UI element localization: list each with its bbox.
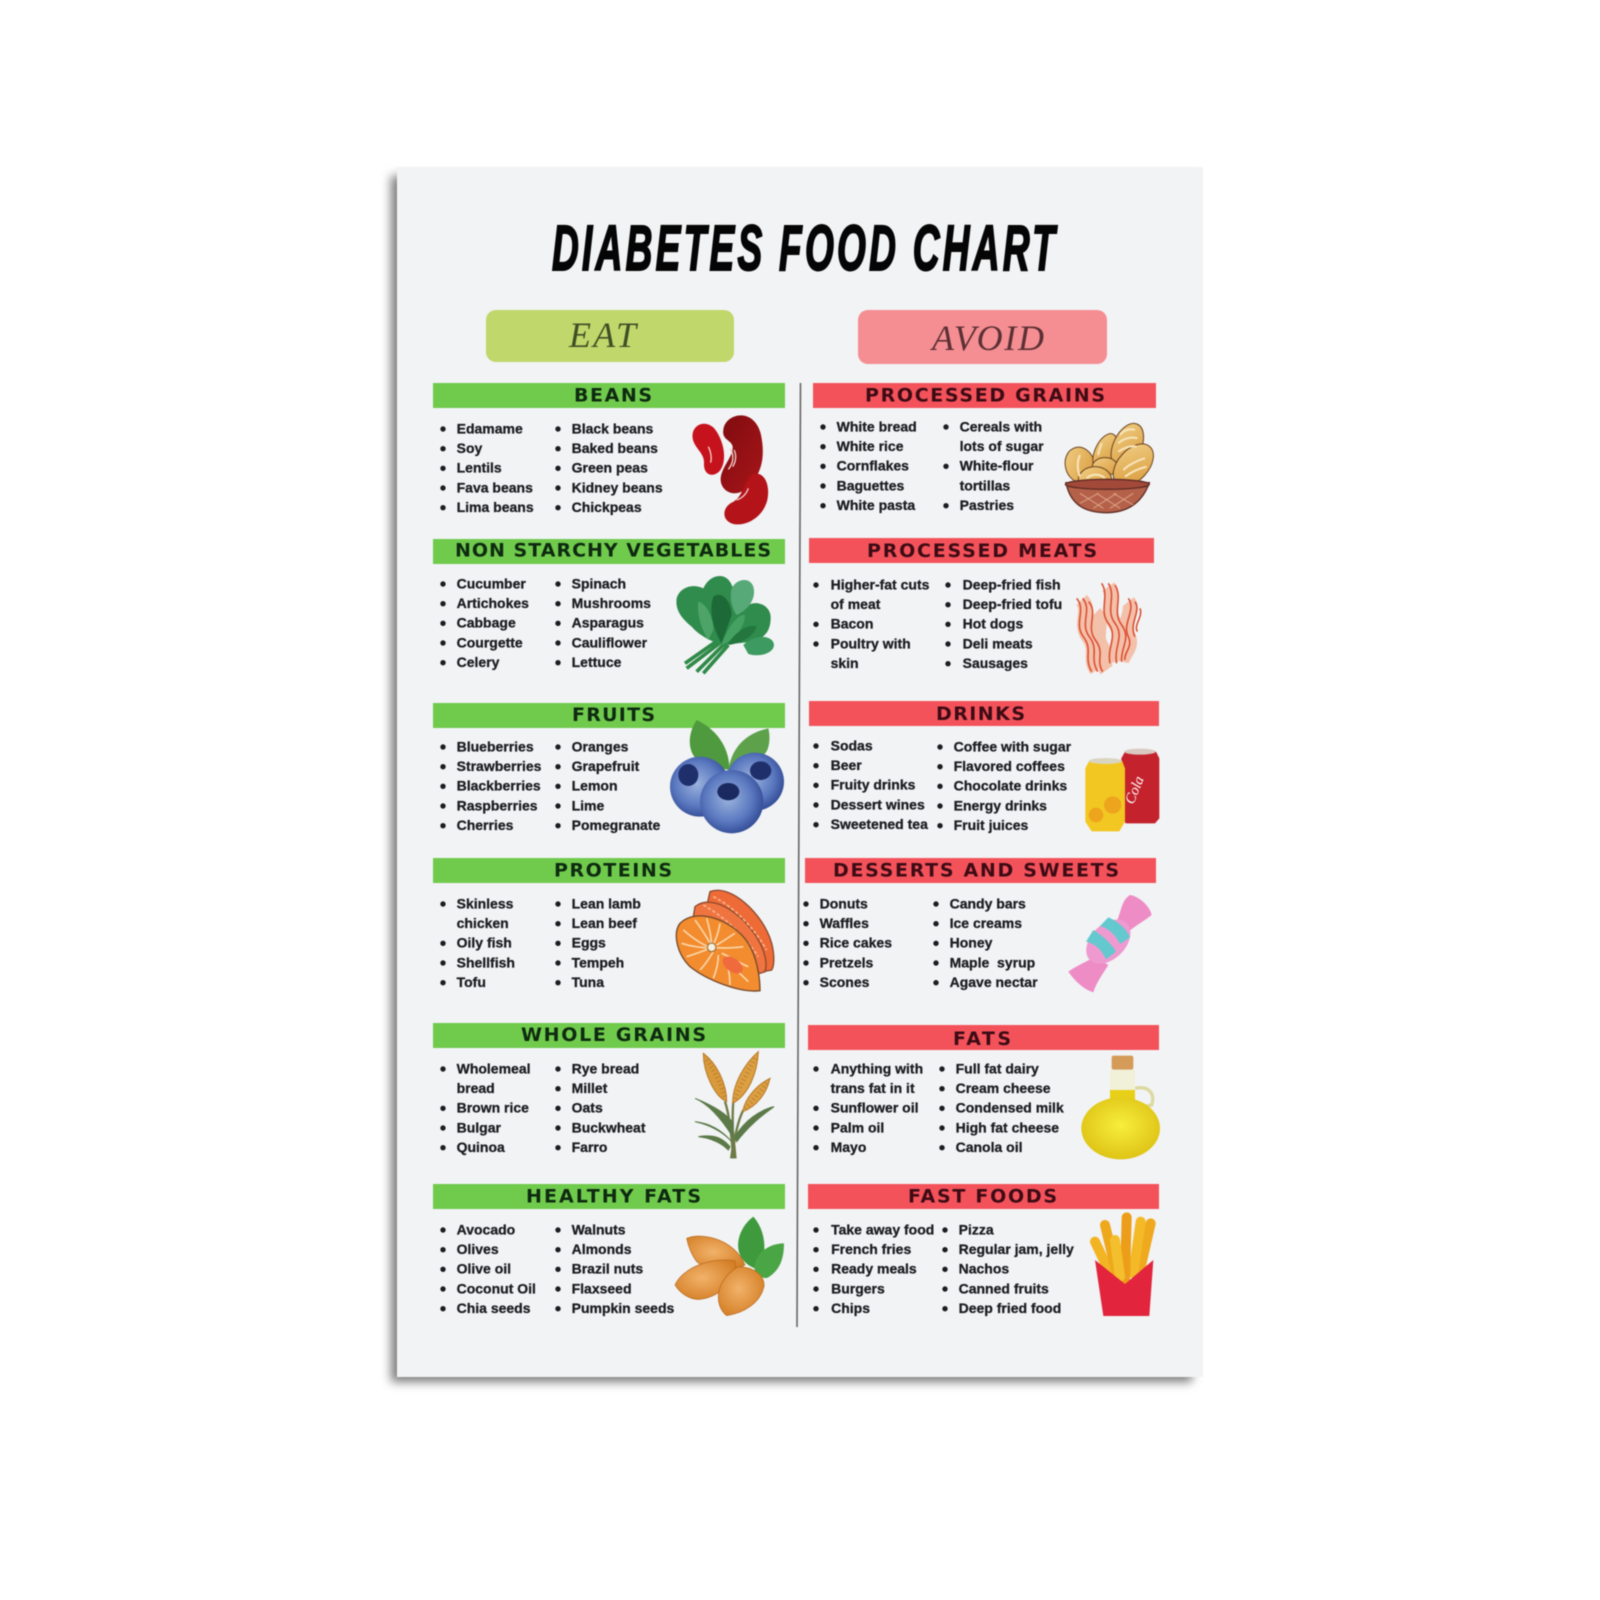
- list: desserts column 1: [806, 895, 892, 990]
- icon: drink cans: [1085, 749, 1159, 831]
- list: drinks column 1: Sodas: [831, 737, 873, 753]
- panel: processed meats: PROCESSED MEATS: [867, 540, 1097, 562]
- list: healthy fats column 1: Olives: [457, 1241, 499, 1257]
- panel: fats: [808, 1025, 1160, 1159]
- list: processed meats column 1: Poultry with: [831, 635, 911, 651]
- panel: fruits: [433, 703, 785, 833]
- list: whole grains column 1: Wholemeal: [457, 1060, 531, 1076]
- list: fruits column 1: [443, 738, 542, 833]
- list: proteins column 1: Oily fish: [457, 935, 512, 951]
- list: whole grains column 1: Brown rice: [457, 1100, 529, 1116]
- panel: healthy fats: HEALTHY FATS: [526, 1185, 701, 1207]
- list: fats column 2: Condensed milk: [956, 1100, 1064, 1116]
- list: drinks column 2: [940, 738, 1072, 833]
- list: proteins column 2: Tuna: [572, 974, 604, 990]
- list: healthy fats column 2: Walnuts: [572, 1221, 626, 1237]
- list: desserts column 1: Pretzels: [820, 954, 874, 970]
- list: desserts column 2: Candy bars: [950, 895, 1026, 911]
- list: drinks column 1: Sweetened tea: [831, 816, 928, 832]
- list: drinks column 2: Coffee with sugar: [954, 738, 1072, 754]
- list: fruits column 2: Oranges: [572, 738, 629, 754]
- list: fats column 1: [816, 1060, 923, 1155]
- list: vegetables column 2: Lettuce: [572, 654, 622, 670]
- list: beans column 1: [443, 420, 534, 515]
- column divider: [797, 383, 800, 1327]
- icon: almonds: [675, 1217, 784, 1316]
- panel: proteins: [433, 858, 785, 991]
- list: healthy fats column 1: Olive oil: [457, 1261, 511, 1277]
- list: fats column 1: Anything with: [831, 1060, 923, 1076]
- list: beans column 2: [558, 420, 663, 515]
- list: fast foods column 1: French fries: [831, 1241, 911, 1257]
- list: desserts column 1: Waffles: [820, 915, 869, 931]
- list: processed meats column 1: [816, 576, 930, 671]
- list: desserts column 2: Honey: [950, 935, 993, 951]
- list: fats column 2: [942, 1060, 1064, 1155]
- icon: kidney beans: [692, 415, 768, 524]
- list: fruits column 2: Lemon: [572, 778, 617, 794]
- panel: fast foods: [808, 1184, 1159, 1316]
- list: fats column 2: Cream cheese: [956, 1080, 1051, 1096]
- list: whole grains column 2: Rye bread: [572, 1060, 639, 1076]
- list: processed meats column 2: Sausages: [963, 655, 1028, 671]
- list: processed meats column 2: Deli meats: [963, 635, 1033, 651]
- list: processed meats column 2: Deep-fried fish: [963, 576, 1061, 592]
- list: whole grains column 2: Farro: [572, 1139, 607, 1155]
- list: beans column 1: Lentils: [457, 460, 502, 476]
- icon: blueberries: [670, 720, 784, 833]
- icon: drink cans: Cola: [1122, 774, 1148, 806]
- list: vegetables column 1: Artichokes: [457, 595, 529, 611]
- list: beans column 1: Soy: [457, 440, 482, 456]
- list: processed grains column 2: Cereals with: [960, 418, 1042, 434]
- list: fruits column 2: [558, 738, 661, 833]
- panel: processed meats: [809, 538, 1154, 672]
- list: proteins column 1: Tofu: [457, 974, 486, 990]
- panel: whole grains: [433, 1023, 785, 1158]
- list: drinks column 1: [816, 737, 928, 832]
- icon: spinach: [676, 576, 774, 673]
- heading: avoid: [858, 310, 1107, 364]
- list: drinks column 2: Fruit juices: [954, 817, 1028, 833]
- list: whole grains column 2: [558, 1060, 646, 1155]
- list: fruits column 1: Blackberries: [457, 778, 541, 794]
- list: vegetables column 1: Celery: [457, 654, 500, 670]
- list: processed meats column 1: skin: [831, 655, 859, 671]
- list: vegetables column 2: Spinach: [572, 575, 626, 591]
- icon: wheat: [695, 1052, 774, 1158]
- list: fast foods column 1: Ready meals: [831, 1261, 917, 1277]
- list: fruits column 2: Pomegranate: [572, 817, 661, 833]
- list: whole grains column 1: Quinoa: [457, 1139, 505, 1155]
- panel: drinks: [809, 701, 1159, 833]
- list: desserts column 1: Scones: [820, 974, 870, 990]
- list: beans column 1: Lima beans: [457, 499, 534, 515]
- list: fast foods column 2: Nachos: [959, 1261, 1009, 1277]
- list: proteins column 1: [443, 895, 515, 990]
- list: fats column 1: Mayo: [831, 1139, 866, 1155]
- icon: salmon slices: [676, 890, 774, 991]
- list: proteins column 2: [558, 895, 641, 990]
- list: healthy fats column 1: Coconut Oil: [457, 1280, 536, 1296]
- list: processed grains column 2: lots of sugar: [960, 438, 1044, 454]
- list: processed meats column 2: Deep-fried tofu: [963, 596, 1062, 612]
- list: healthy fats column 1: Avocado: [457, 1221, 515, 1237]
- panel: drinks: DRINKS: [936, 703, 1025, 725]
- list: processed grains column 1: Cornflakes: [837, 458, 909, 474]
- list: vegetables column 1: Courgette: [457, 634, 523, 650]
- list: drinks column 1: Fruity drinks: [831, 777, 916, 793]
- list: fats column 1: Sunflower oil: [831, 1100, 918, 1116]
- panel: non starchy vegetables: NON STARCHY VEGETABLES: [455, 540, 771, 562]
- list: desserts column 2: Ice creams: [950, 915, 1022, 931]
- list: proteins column 2: Tempeh: [572, 954, 624, 970]
- poster shadow: [391, 176, 1192, 1382]
- list: processed meats column 1: Higher-fat cuts: [831, 576, 930, 592]
- heading: avoid: AVOID: [930, 318, 1044, 358]
- list: fruits column 2: Lime: [572, 797, 604, 813]
- list: processed grains column 1: White pasta: [837, 497, 915, 513]
- list: proteins column 1: Shellfish: [457, 954, 515, 970]
- list: desserts column 2: Maple syrup: [950, 954, 1035, 970]
- panel: healthy fats: [433, 1184, 785, 1316]
- list: vegetables column 1: Cucumber: [457, 575, 526, 591]
- list: beans column 2: Black beans: [572, 420, 654, 436]
- list: fats column 2: Canola oil: [956, 1139, 1023, 1155]
- icon: oil bottle: [1081, 1056, 1160, 1159]
- list: drinks column 1: Dessert wines: [831, 796, 925, 812]
- list: healthy fats column 2: Almonds: [572, 1241, 632, 1257]
- list: desserts column 2: Agave nectar: [950, 974, 1038, 990]
- list: fast foods column 1: Burgers: [831, 1280, 885, 1296]
- heading: eat: EAT: [568, 315, 639, 355]
- list: fats column 2: Full fat dairy: [956, 1060, 1039, 1076]
- list: fast foods column 2: Pizza: [959, 1221, 994, 1237]
- list: processed meats column 1: of meat: [831, 596, 881, 612]
- list: vegetables column 1: [443, 575, 529, 670]
- list: fats column 1: Palm oil: [831, 1119, 884, 1135]
- poster panel: [397, 167, 1203, 1377]
- icon: candy: [1068, 895, 1152, 992]
- panel: desserts and sweets: [805, 858, 1156, 992]
- icon: bacon: [1077, 583, 1141, 672]
- panel: fats: FATS: [953, 1028, 1011, 1050]
- list: fast foods column 1: Chips: [831, 1300, 870, 1316]
- list: desserts column 2: [936, 895, 1038, 990]
- list: proteins column 2: Lean lamb: [572, 895, 641, 911]
- list: fruits column 1: Raspberries: [457, 797, 538, 813]
- list: beans column 1: Edamame: [457, 420, 523, 436]
- list: healthy fats column 2: Brazil nuts: [572, 1261, 643, 1277]
- list: processed meats column 1: Bacon: [831, 616, 873, 632]
- panel: desserts and sweets: DESSERTS AND SWEETS: [833, 860, 1119, 882]
- panel: non starchy vegetables: [433, 539, 785, 673]
- list: processed grains column 2: White-flour: [960, 458, 1034, 474]
- panel: processed grains: [813, 383, 1161, 513]
- list: whole grains column 2: Buckwheat: [572, 1119, 646, 1135]
- list: vegetables column 2: Cauliflower: [572, 634, 648, 650]
- list: whole grains column 1: Bulgar: [457, 1119, 501, 1135]
- panel: proteins: PROTEINS: [554, 860, 672, 882]
- panel: processed grains: PROCESSED GRAINS: [865, 385, 1105, 407]
- panel: beans: [433, 383, 785, 524]
- icon: french fries: [1095, 1217, 1153, 1316]
- list: beans column 2: Chickpeas: [572, 499, 642, 515]
- list: vegetables column 2: Mushrooms: [572, 595, 651, 611]
- list: healthy fats column 2: Pumpkin seeds: [572, 1300, 675, 1316]
- list: processed meats column 2: Hot dogs: [963, 616, 1023, 632]
- list: fruits column 1: Blueberries: [457, 738, 534, 754]
- list: fast foods column 2: Deep fried food: [959, 1300, 1061, 1316]
- list: drinks column 2: Flavored coffees: [954, 758, 1065, 774]
- list: beans column 1: Fava beans: [457, 479, 533, 495]
- panel: fast foods: FAST FOODS: [908, 1185, 1057, 1207]
- list: proteins column 2: Eggs: [572, 935, 606, 951]
- list: healthy fats column 1: [443, 1221, 536, 1316]
- panel: beans: BEANS: [574, 385, 652, 407]
- heading: eat: [486, 310, 734, 362]
- list: fast foods column 2: Regular jam, jelly: [959, 1241, 1074, 1257]
- list: proteins column 1: chicken: [457, 915, 509, 931]
- icon: bread basket: [1061, 418, 1161, 513]
- list: fats column 2: High fat cheese: [956, 1119, 1059, 1135]
- list: proteins column 1: Skinless: [457, 895, 514, 911]
- list: beans column 2: Green peas: [572, 460, 648, 476]
- list: processed grains column 1: White rice: [837, 438, 904, 454]
- list: fats column 1: trans fat in it: [831, 1080, 915, 1096]
- list: vegetables column 2: Asparagus: [572, 615, 644, 631]
- list: desserts column 1: Donuts: [820, 895, 868, 911]
- list: fruits column 1: Strawberries: [457, 758, 542, 774]
- list: beans column 2: Baked beans: [572, 440, 658, 456]
- panel: whole grains: WHOLE GRAINS: [521, 1024, 706, 1046]
- list: fast foods column 1: Take away food: [831, 1221, 934, 1237]
- list: healthy fats column 1: Chia seeds: [457, 1300, 531, 1316]
- list: processed meats column 2: [948, 576, 1062, 671]
- list: processed grains column 2: [946, 418, 1044, 513]
- panel: fruits: FRUITS: [572, 704, 655, 726]
- list: processed grains column 1: [823, 418, 917, 513]
- list: processed grains column 1: Baguettes: [837, 477, 904, 493]
- list: processed grains column 2: tortillas: [960, 477, 1010, 493]
- list: whole grains column 1: bread: [457, 1080, 495, 1096]
- list: fast foods column 2: Canned fruits: [959, 1280, 1049, 1296]
- list: fast foods column 1: [816, 1221, 934, 1316]
- list: whole grains column 2: Oats: [572, 1100, 603, 1116]
- list: fast foods column 2: [945, 1221, 1074, 1316]
- list: proteins column 2: Lean beef: [572, 915, 637, 931]
- title: DIABETES FOOD CHART: [552, 214, 1058, 285]
- list: drinks column 1: Beer: [831, 757, 862, 773]
- list: healthy fats column 2: Flaxseed: [572, 1280, 632, 1296]
- list: vegetables column 1: Cabbage: [457, 615, 516, 631]
- list: processed grains column 2: Pastries: [960, 497, 1014, 513]
- list: drinks column 2: Chocolate drinks: [954, 778, 1067, 794]
- list: drinks column 2: Energy drinks: [954, 797, 1047, 813]
- list: processed grains column 1: White bread: [837, 418, 917, 434]
- list: whole grains column 2: Millet: [572, 1080, 608, 1096]
- list: desserts column 1: Rice cakes: [820, 935, 892, 951]
- list: whole grains column 1: [443, 1060, 531, 1155]
- list: healthy fats column 2: [558, 1221, 675, 1316]
- list: fruits column 1: Cherries: [457, 817, 514, 833]
- list: beans column 2: Kidney beans: [572, 479, 663, 495]
- list: fruits column 2: Grapefruit: [572, 758, 640, 774]
- list: vegetables column 2: [558, 575, 651, 670]
